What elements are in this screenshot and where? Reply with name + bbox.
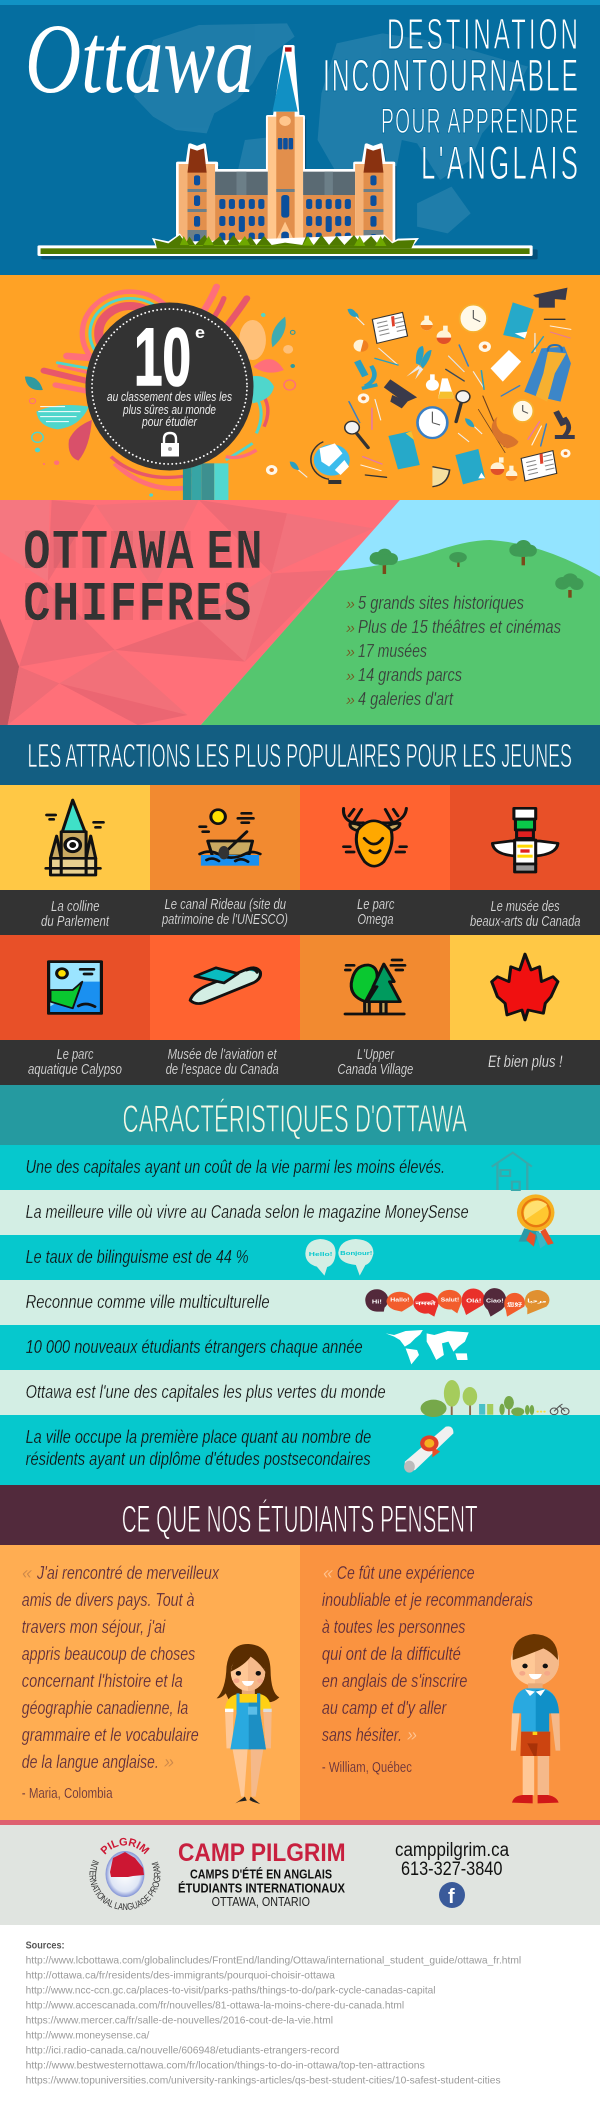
text: Camp Pilgrim: CAMPS D'ÉTÉ EN ANGLAIS xyxy=(190,1866,332,1882)
text: characteristics list: Une des capitales ayant un coût de la vie parmi les moins élevés. xyxy=(26,1156,445,1177)
icon: world map xyxy=(386,1330,469,1364)
captions: attractions: Le parc xyxy=(57,1046,94,1063)
captions: attractions: Omega xyxy=(358,911,394,928)
quote: Maria: appris beaucoup de choses xyxy=(22,1644,195,1664)
badge: 10e ranking: 10 xyxy=(134,312,191,403)
captions: attractions: du Parlement xyxy=(41,913,110,930)
character: boy xyxy=(511,1634,560,1803)
icons: characteristics xyxy=(305,1153,554,1364)
icons: school supplies xyxy=(266,288,575,487)
captions: attractions: patrimoine de l'UNESCO) xyxy=(161,911,288,928)
text: sources: http://www.ncc-ccn.gc.ca/places-to-visit/parks-paths/things-to-do/park-cycle-canadas-capital xyxy=(26,1984,435,1996)
list: key figures: » xyxy=(346,668,355,685)
captions: attractions: La colline xyxy=(51,898,100,915)
captions: attractions: Le parc xyxy=(357,896,395,913)
text: contact xyxy=(395,1840,509,1880)
icon: deer xyxy=(343,808,406,866)
icon: atoms xyxy=(266,341,571,475)
icon: parliament building xyxy=(37,47,538,259)
decoration: colourful splash xyxy=(25,287,295,500)
world map backdrop xyxy=(134,23,528,260)
badge: 10e ranking xyxy=(86,302,254,470)
text: sources xyxy=(26,1940,521,2086)
text: characteristics list xyxy=(26,1156,469,1469)
icon: facebook xyxy=(439,1882,465,1908)
quote: William: - William, Québec xyxy=(322,1759,412,1776)
icon: flasks xyxy=(354,316,517,481)
panel: testimonials xyxy=(0,1545,600,1825)
quote: William xyxy=(322,1563,533,1776)
icon: magnifiers xyxy=(345,391,470,448)
icon: medal xyxy=(517,1194,554,1248)
quote: Maria: amis de divers pays. Tout à xyxy=(22,1590,194,1610)
list: key figures xyxy=(346,593,561,709)
quote: Maria: J'ai rencontré de merveilleux xyxy=(36,1563,220,1583)
text: Camp Pilgrim: OTTAWA, ONTARIO xyxy=(212,1894,310,1909)
quote: William: qui ont de la difficulté xyxy=(322,1644,461,1664)
icon: parliament hill xyxy=(46,800,103,875)
icon: multilingual speech bubbles xyxy=(365,1288,549,1317)
list: key figures: » xyxy=(346,596,355,613)
text: sources: http://ici.radio-canada.ca/nouvelle/606948/etudiants-etrangers-record xyxy=(26,2044,340,2056)
quote: William: sans hésiter. xyxy=(322,1725,402,1745)
icon: pens and rulers xyxy=(349,319,571,477)
badge: 10e ranking: au classement des villes les xyxy=(107,389,232,404)
icon: speech bubbles hello bonjour xyxy=(305,1239,373,1276)
icon: maple leaf xyxy=(492,954,558,1020)
icons: attractions xyxy=(46,800,558,1020)
text: contact: 613-327-3840 xyxy=(401,1859,502,1880)
icons: trees xyxy=(370,540,584,598)
captions: attractions: Canada Village xyxy=(338,1061,413,1078)
text: sources: Sources: xyxy=(26,1940,65,1952)
icon: totem pole xyxy=(492,808,558,872)
logo: Pilgrim xyxy=(89,1838,160,1910)
text: characteristics list: Reconnue comme ville multiculturelle xyxy=(26,1291,270,1312)
heading: ce que nos étudiants pensent xyxy=(0,1485,600,1545)
text: Camp Pilgrim: ÉTUDIANTS INTERNATIONAUX xyxy=(178,1880,345,1896)
list: key figures: » xyxy=(346,644,355,661)
icon: multilingual speech bubbles: Olá! xyxy=(466,1299,481,1304)
icon: graduation caps xyxy=(384,288,567,408)
text: sources: http://ottawa.ca/fr/residents/des-immigrants/pourquoi-choisir-ottawa xyxy=(26,1970,335,1982)
icon: diploma xyxy=(404,1426,453,1473)
text: sources: http://www.moneysense.ca/ xyxy=(26,2030,149,2042)
badge: 10e ranking: plus sûres au monde xyxy=(122,402,216,417)
icon: Upper Canada Village trees xyxy=(345,960,405,1014)
list: key figures: Plus de 15 théâtres et cinémas xyxy=(358,617,561,637)
icon: house xyxy=(492,1153,532,1190)
title: destination incontournable: INCONTOURNABLE xyxy=(323,50,578,101)
icon: Rideau canal xyxy=(200,810,260,866)
text: sources: https://www.topuniversities.com/university-rankings-articles/qs-best-student-cities/10-safest-student-cities xyxy=(26,2074,501,2086)
icon: multilingual speech bubbles: 您好 xyxy=(507,1300,523,1308)
panel: attractions grid xyxy=(0,785,600,1085)
icon: Calypso water park xyxy=(49,962,101,1013)
text: sources: http://www.accescanada.com/fr/nouvelles/81-ottawa-la-moins-chere-du-canada.html xyxy=(26,2000,404,2012)
list: key figures: 17 musées xyxy=(358,641,427,661)
quote: Maria: » xyxy=(164,1752,174,1772)
text: characteristics list: La meilleure ville où vivre au Canada selon le magazine MoneySense xyxy=(26,1201,469,1222)
quote: Maria: grammaire et le vocabulaire xyxy=(22,1725,199,1745)
quote: Maria: géographie canadienne, la xyxy=(22,1698,188,1718)
icon: microscopes xyxy=(354,360,575,439)
icon: scissors and darts xyxy=(290,309,482,477)
list: key figures: » xyxy=(346,620,355,637)
heading: Ottawa en chiffres: OTTAWAEN xyxy=(23,522,263,586)
title: destination incontournable: L'ANGLAIS xyxy=(421,138,578,190)
icon: clocks xyxy=(417,305,533,438)
text: characteristics list: La ville occupe la première place quant au nombre de xyxy=(26,1426,371,1447)
captions: attractions: Musée de l'aviation et xyxy=(168,1046,277,1063)
quote: Maria: concernant l'histoire et la xyxy=(22,1671,183,1691)
icon: open books xyxy=(372,312,557,481)
icon: protractor xyxy=(432,467,450,487)
list: key figures: 5 grands sites historiques xyxy=(358,593,524,613)
captions: attractions: de l'espace du Canada xyxy=(166,1061,279,1078)
list: key figures: » xyxy=(346,692,355,709)
quote: William: inoubliable et je recommanderais xyxy=(322,1590,533,1610)
quote: William: « xyxy=(323,1563,333,1583)
text: Camp Pilgrim: CAMP PILGRIM xyxy=(178,1839,346,1867)
quote: Maria: « xyxy=(22,1563,32,1583)
list: key figures: 14 grands parcs xyxy=(358,665,462,685)
badge: 10e ranking: pour étudier xyxy=(141,414,198,429)
icon: airplane xyxy=(181,954,264,1007)
captions: attractions xyxy=(28,896,580,1078)
text: contact: camppilgrim.ca xyxy=(395,1840,509,1861)
icon: checklist xyxy=(491,350,521,382)
panel: footer contact xyxy=(0,1825,600,1925)
heading: Ottawa en chiffres: CHIFFRES xyxy=(23,574,251,638)
quote: Maria: - Maria, Colombia xyxy=(22,1785,113,1802)
captions: attractions: Le canal Rideau (site du xyxy=(164,896,286,913)
quote: William: en anglais de s'inscrire xyxy=(322,1671,467,1691)
text: sources: http://www.bestwesternottawa.com/fr/location/things-to-do-in-ottawa/top-ten-attractions xyxy=(26,2060,425,2072)
icon: multilingual speech bubbles: Hi! xyxy=(372,1300,382,1306)
icon: globe xyxy=(311,442,350,484)
text: characteristics list: Ottawa est l'une des capitales les plus vertes du monde xyxy=(26,1381,386,1402)
captions: attractions: Et bien plus ! xyxy=(488,1052,563,1071)
logo: Pilgrim: INTERNATIONAL LANGUAGE PROGRAM xyxy=(89,1860,160,1910)
captions: attractions: L'Upper xyxy=(357,1046,395,1063)
title: destination incontournable: POUR APPRENDRE xyxy=(381,101,578,140)
title: destination incontournable: DESTINATION xyxy=(387,9,578,59)
icon: backpack xyxy=(524,345,571,402)
text: sources: http://www.lcbottawa.com/globalincludes/FrontEnd/landing/Ottawa/international_student_guide/ottawa_fr.html xyxy=(26,1954,521,1966)
quote: William: à toutes les personnes xyxy=(322,1617,465,1637)
text: characteristics list: Le taux de bilinguisme est de 44 % xyxy=(26,1246,249,1267)
quote: William: » xyxy=(407,1725,417,1745)
title: destination incontournable xyxy=(323,9,578,190)
logo: Pilgrim: PILGRIM xyxy=(100,1838,150,1854)
icon: facebook: f xyxy=(448,1886,455,1908)
list: key figures: 4 galeries d'art xyxy=(358,689,454,709)
icon: speech bubbles hello bonjour: Hello! xyxy=(309,1252,333,1258)
quote: William: Ce fût une expérience xyxy=(337,1563,475,1583)
icon: speech bubbles hello bonjour: Bonjour! xyxy=(340,1251,373,1257)
icon: teal books xyxy=(388,302,534,484)
panel: Ottawa en chiffres xyxy=(0,500,600,725)
icon: multilingual speech bubbles: नमस्ते xyxy=(414,1300,437,1307)
quote: Maria xyxy=(22,1563,220,1802)
quote: Maria: travers mon séjour, j'ai xyxy=(22,1617,166,1637)
captions: attractions: Le musée des xyxy=(491,898,560,915)
badge: 10e ranking: e xyxy=(195,323,205,342)
icon: multilingual speech bubbles: Hallo! xyxy=(390,1298,410,1304)
character: girl xyxy=(217,1644,279,1804)
quote: Maria: de la langue anglaise. xyxy=(22,1752,159,1772)
text: characteristics list: résidents ayant un diplôme d'études postsecondaires xyxy=(26,1448,371,1469)
quote: William: au camp et d'y aller xyxy=(322,1698,447,1718)
heading: Ottawa en chiffres xyxy=(23,522,263,638)
panel: characteristics xyxy=(0,1145,600,1485)
text: sources: https://www.mercer.ca/fr/salle-de-nouvelles/2016-cout-de-la-vie.html xyxy=(26,2014,333,2026)
icon: multilingual speech bubbles: Salut! xyxy=(441,1298,459,1304)
icon: multilingual speech bubbles: Ciao! xyxy=(486,1299,504,1305)
icon: green city xyxy=(421,1380,569,1417)
title: Ottawa: Ottawa xyxy=(25,3,254,114)
icon: padlock xyxy=(161,433,179,456)
icon: multilingual speech bubbles: مرحبا xyxy=(527,1299,547,1304)
captions: attractions: aquatique Calypso xyxy=(28,1061,122,1078)
text: Camp Pilgrim xyxy=(178,1839,346,1909)
heading: attractions xyxy=(0,725,600,785)
panel: header xyxy=(0,0,600,275)
panel: safety ranking xyxy=(0,275,600,500)
text: characteristics list: 10 000 nouveaux étudiants étrangers chaque année xyxy=(26,1336,363,1357)
heading: caractéristiques xyxy=(0,1085,600,1145)
icon: violin xyxy=(492,417,518,448)
background: low-poly and landscape xyxy=(0,500,600,725)
